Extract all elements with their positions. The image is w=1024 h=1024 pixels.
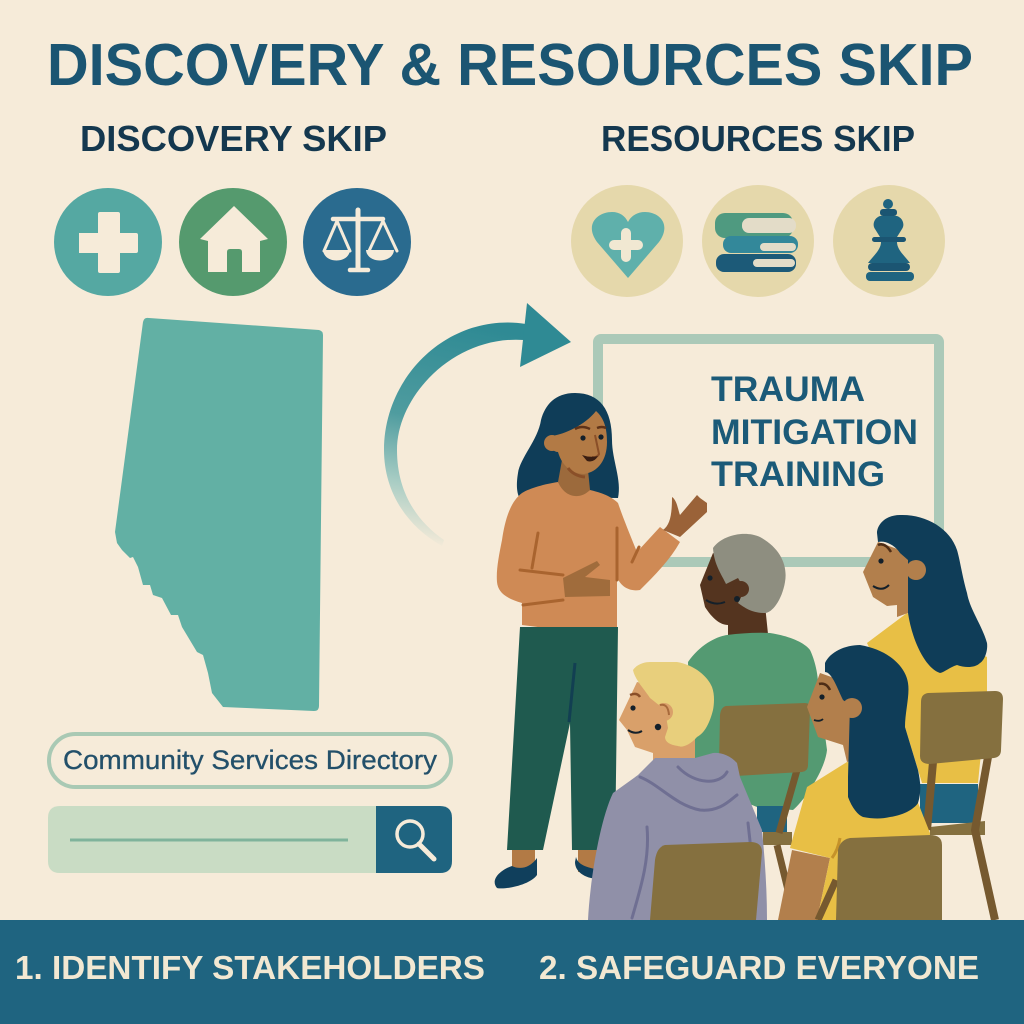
heading: discovery skip: DISCOVERY SKIP	[80, 118, 387, 159]
training board: MITIGATION	[711, 413, 918, 452]
training board	[598, 339, 939, 562]
audience: older man in green	[688, 534, 827, 832]
chair: yellow woman's chair	[920, 691, 1003, 920]
map of Alberta	[115, 318, 323, 711]
icon: scales of justice	[303, 188, 411, 296]
audience: blond person in hoodie	[588, 662, 767, 920]
icon: stack of books	[702, 185, 814, 297]
icon: chess king	[833, 185, 945, 297]
footer banner	[0, 920, 1024, 1024]
presenter	[495, 393, 707, 888]
training board: TRAINING	[711, 455, 885, 494]
search bar	[48, 806, 452, 873]
title: DISCOVERY & RESOURCES SKIP	[47, 32, 973, 98]
heading: resources skip: RESOURCES SKIP	[601, 118, 915, 159]
icon: medical cross	[54, 188, 162, 296]
chair: green man's chair	[719, 703, 810, 890]
directory label	[49, 734, 451, 787]
footer banner: 1. IDENTIFY STAKEHOLDERS	[15, 950, 485, 987]
chair: hoodie person's chair	[650, 842, 762, 920]
training board: TRAUMA	[711, 370, 865, 409]
icon: heart with plus	[571, 185, 683, 297]
audience: woman in yellow back right	[863, 515, 987, 823]
icon: house	[179, 188, 287, 296]
chair: front woman's chair	[818, 835, 942, 920]
curved arrow	[384, 303, 571, 546]
directory label: Community Services Directory	[63, 745, 438, 775]
footer banner: 2. SAFEGUARD EVERYONE	[539, 950, 979, 987]
audience: woman in yellow front	[778, 645, 930, 920]
